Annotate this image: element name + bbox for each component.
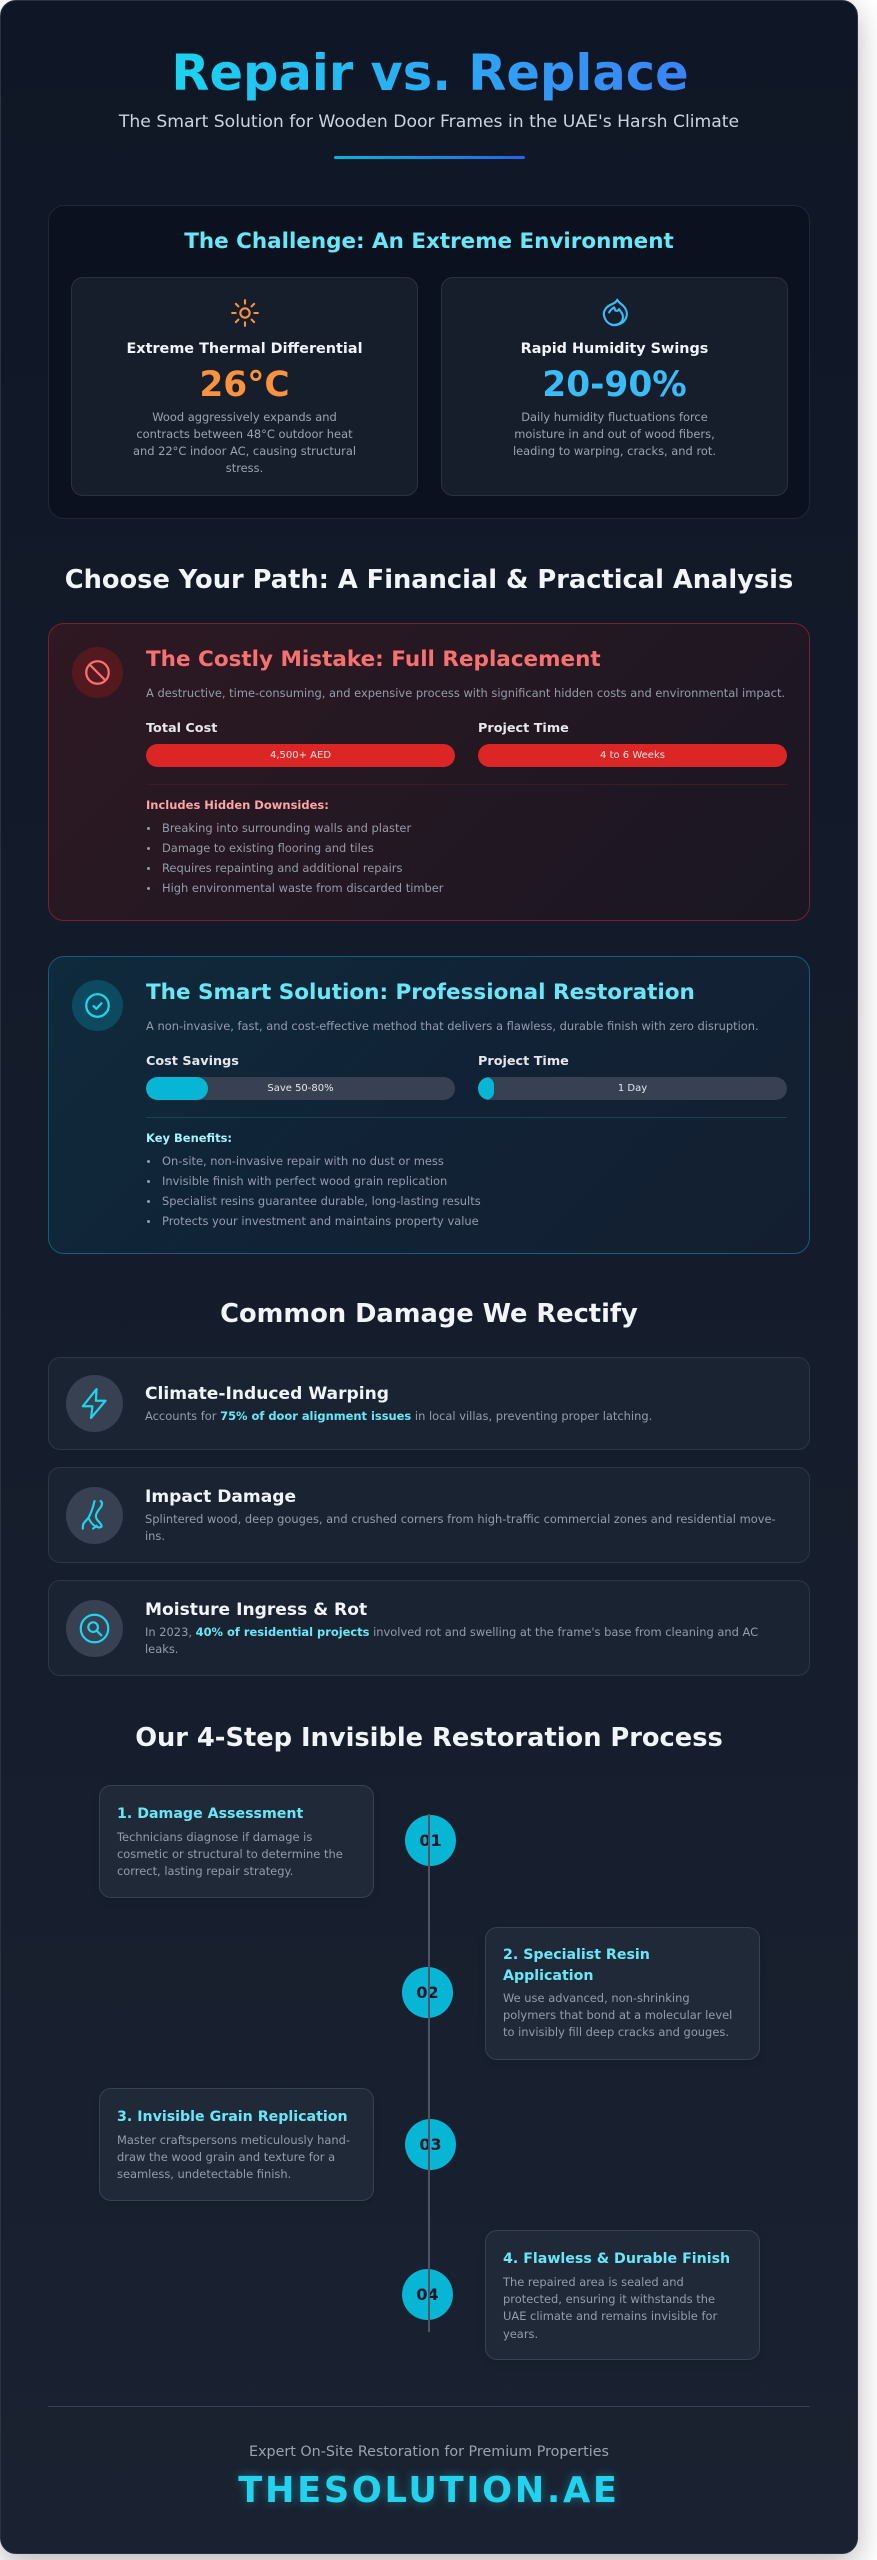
bar: save 50-80%: Save 50-80% (267, 1083, 334, 1094)
damage title: Moisture Ingress & Rot (145, 1600, 367, 1620)
benefits list: Invisible finish with perfect wood grain replication (162, 1174, 447, 1188)
step description (117, 2133, 350, 2181)
step description: protected, ensuring it withstands the (503, 2292, 715, 2306)
icon: sun (231, 299, 259, 327)
bar: 4 to 6 weeks (478, 744, 787, 767)
metric: cost savings (146, 1054, 455, 1100)
step description: The repaired area is sealed and (503, 2275, 684, 2289)
heading: process: Our 4-Step Invisible Restoration Process (135, 1723, 723, 1753)
bar: 4,500+ AED: 4,500+ AED (270, 750, 331, 761)
card: thermal differential (71, 277, 418, 496)
metric: project time (478, 1054, 787, 1100)
title: Repair vs. Replace (171, 44, 689, 102)
card description: leading to warping, cracks, and rot. (513, 444, 716, 458)
step 3 number: 03 (419, 2135, 442, 2154)
panel: full replacement (48, 623, 810, 921)
step description: draw the wood grain and texture for a (117, 2150, 335, 2164)
card description (513, 410, 716, 458)
header divider (334, 156, 525, 159)
step 2 number: 02 (416, 1983, 439, 2002)
downsides list: Damage to existing flooring and tiles (162, 841, 374, 855)
footer (236, 2444, 620, 2511)
card: climate-induced warping (48, 1357, 810, 1450)
step description: polymers that bond at a molecular level (503, 2008, 732, 2022)
icon: impact marks (66, 1487, 123, 1544)
card description: contracts between 48°C outdoor heat (136, 427, 353, 441)
benefits list (147, 1154, 481, 1228)
damage description (145, 1512, 776, 1543)
step description: to invisibly fill deep cracks and gouges. (503, 2025, 729, 2039)
step 1 card (99, 1785, 374, 1898)
card heading: Rapid Humidity Swings (521, 341, 708, 357)
step description: UAE climate and remains invisible for (503, 2309, 717, 2323)
benefits list: Protects your investment and maintains property value (162, 1214, 479, 1228)
downsides heading: Includes Hidden Downsides: (146, 798, 329, 812)
downsides list: High environmental waste from discarded timber (162, 881, 444, 895)
step title: 4. Flawless & Durable Finish (503, 2251, 730, 2267)
icon: lightning (66, 1375, 123, 1432)
damage description: Accounts for 75% of door alignment issues in local villas, preventing proper latching. (145, 1409, 652, 1423)
card: moisture ingress (48, 1580, 810, 1676)
heading: common damage: Common Damage We Rectify (220, 1299, 638, 1329)
step description: seamless, undetectable finish. (117, 2167, 291, 2181)
damage description: Splintered wood, deep gouges, and crushed corners from high-traffic commercial zones and residential move- (145, 1512, 776, 1526)
metric: total cost (146, 721, 455, 767)
step description (503, 1991, 732, 2039)
card heading: Extreme Thermal Differential (126, 341, 363, 357)
card description: stress. (226, 461, 263, 475)
step 3 card (99, 2088, 374, 2201)
step description (503, 2275, 718, 2341)
card description: Daily humidity fluctuations force (521, 410, 708, 424)
panel description: A destructive, time-consuming, and expensive process with significant hidden costs and environmental impact. (146, 686, 785, 700)
step description: Master craftspersons meticulously hand- (117, 2133, 350, 2147)
icon: droplets (602, 298, 628, 326)
downsides list (147, 821, 444, 895)
card description: moisture in and out of wood fibers, (514, 427, 715, 441)
step description: years. (503, 2327, 538, 2341)
step title: 1. Damage Assessment (117, 1806, 303, 1822)
step 2 card (485, 1927, 760, 2060)
card: impact damage (48, 1467, 810, 1563)
bar: 4,500+ AED (146, 744, 455, 767)
downsides list: Breaking into surrounding walls and plaster (162, 821, 411, 835)
card description: Wood aggressively expands and (152, 410, 337, 424)
stat: 26°C: 26°C (199, 365, 290, 405)
benefits list: On-site, non-invasive repair with no dust or mess (162, 1154, 444, 1168)
step 4 number: 04 (416, 2285, 439, 2304)
card description (133, 410, 356, 475)
metric label: Total Cost (146, 721, 217, 736)
icon: check circle (72, 980, 123, 1031)
header (118, 44, 739, 159)
damage title: Impact Damage (145, 1487, 296, 1507)
step description (117, 1830, 343, 1878)
panel: the challenge (48, 205, 810, 519)
card description: and 22°C indoor AC, causing structural (133, 444, 356, 458)
step title: 2. Specialist Resin (503, 1947, 650, 1963)
heading: choose your path: Choose Your Path: A Financial & Practical Analysis (65, 565, 793, 595)
challenge heading: The Challenge: An Extreme Environment (184, 229, 674, 254)
bar: 1 day: 1 Day (618, 1083, 647, 1094)
benefits list: Specialist resins guarantee durable, long-lasting results (162, 1194, 481, 1208)
metric: project time (478, 721, 787, 767)
panel title: The Costly Mistake: Full Replacement (146, 647, 601, 672)
damage description: leaks. (145, 1642, 178, 1656)
step 4 card (485, 2230, 760, 2360)
panel title: The Smart Solution: Professional Restoration (146, 980, 695, 1005)
metric label: Cost Savings (146, 1054, 239, 1069)
stat: 20-90%: 20-90% (542, 365, 687, 405)
damage description: ins. (145, 1529, 165, 1543)
footer brand: THESOLUTION.AE (238, 2470, 620, 2511)
step 1 number (405, 1815, 456, 1866)
footer tagline: Expert On-Site Restoration for Premium Properties (249, 2444, 609, 2460)
step description: correct, lasting repair strategy. (117, 1864, 293, 1878)
card: humidity swings (441, 277, 788, 496)
bar: 1 day (478, 1077, 787, 1100)
step title: 3. Invisible Grain Replication (117, 2109, 348, 2125)
step description: We use advanced, non-shrinking (503, 1991, 690, 2005)
bar: 4 to 6 weeks: 4 to 6 Weeks (600, 750, 665, 761)
metric label: Project Time (478, 721, 569, 736)
damage description (145, 1625, 758, 1656)
bar: save 50-80% (146, 1077, 455, 1100)
benefits heading: Key Benefits: (146, 1131, 232, 1145)
step description: cosmetic or structural to determine the (117, 1847, 343, 1861)
step title (503, 1947, 650, 1984)
damage description: In 2023, 40% of residential projects involved rot and swelling at the frame's base from cleaning and AC (145, 1625, 758, 1639)
step 3 number (405, 2119, 456, 2170)
timeline (99, 1785, 760, 2360)
step 1 number: 01 (419, 1831, 442, 1850)
icon: ban (72, 647, 123, 698)
icon: search circle (66, 1600, 123, 1657)
panel description: A non-invasive, fast, and cost-effective method that delivers a flawless, durable finish with zero disruption. (146, 1019, 759, 1033)
step 2 number (402, 1967, 453, 2018)
subtitle: The Smart Solution for Wooden Door Frames in the UAE's Harsh Climate (119, 112, 739, 132)
step 4 number (402, 2269, 453, 2320)
step title: Application (503, 1968, 594, 1984)
panel: professional restoration (48, 956, 810, 1254)
metric label: Project Time (478, 1054, 569, 1069)
damage title: Climate-Induced Warping (145, 1384, 389, 1404)
step description: Technicians diagnose if damage is (117, 1830, 312, 1844)
downsides list: Requires repainting and additional repairs (162, 861, 402, 875)
